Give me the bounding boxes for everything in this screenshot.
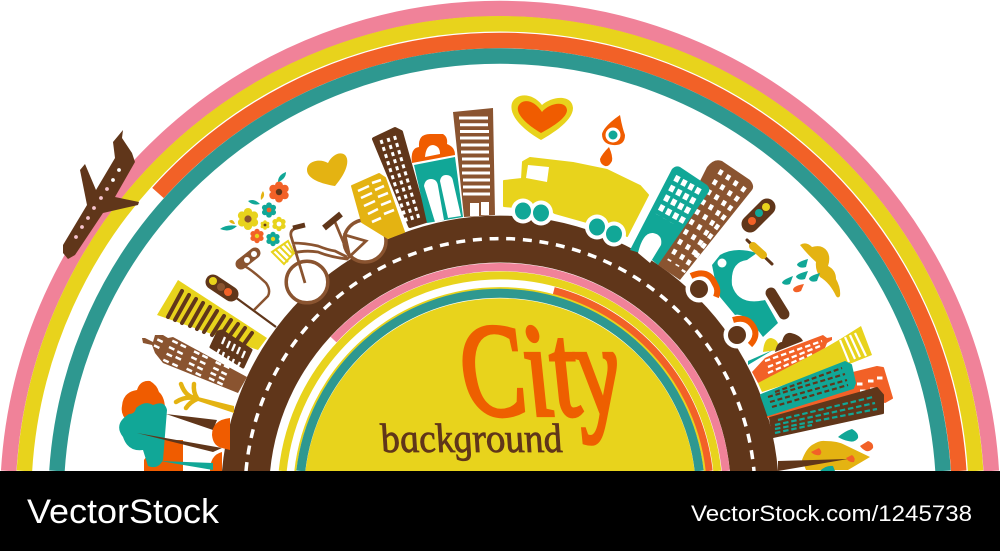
building: teal with orange dome [412,134,463,223]
icon: rain cloud [782,243,840,298]
building: striped brown tower [453,108,495,217]
building: teal right [630,166,709,265]
building: brown right [658,160,753,280]
icon: yellow truck [504,158,648,246]
icon: scooter [686,240,784,348]
footer brand: VectorStock: VectorStock [27,493,220,531]
icon: flower bouquet [220,172,289,246]
subtitle: background: background [375,415,567,461]
icon: drops [600,115,625,166]
building: dark brown tower [374,129,426,226]
icon: heart with outline [511,95,573,140]
footer url: VectorStock.com/1245738 [691,501,972,526]
icon: leaf tree bottom right [778,429,873,471]
building: small dark brown block [211,331,251,367]
icon: left traffic light [209,251,276,327]
inner rainbow [283,267,726,471]
icon: gold heart [307,153,347,186]
building: gold low-rise [352,174,404,238]
buildings: bottom right stack [748,326,892,437]
road ring [222,216,778,471]
icon: bicycle [272,214,386,303]
building: light brown with spire [142,335,247,393]
trees bottom left [119,381,230,471]
icon: right traffic light [748,203,770,225]
title: City: City [442,298,635,445]
footer bar [0,471,1000,551]
icon: airplane [63,130,139,259]
icon: gold small tree [176,384,234,413]
building: yellow striped slab [157,280,267,350]
yellow central disc [305,298,695,471]
